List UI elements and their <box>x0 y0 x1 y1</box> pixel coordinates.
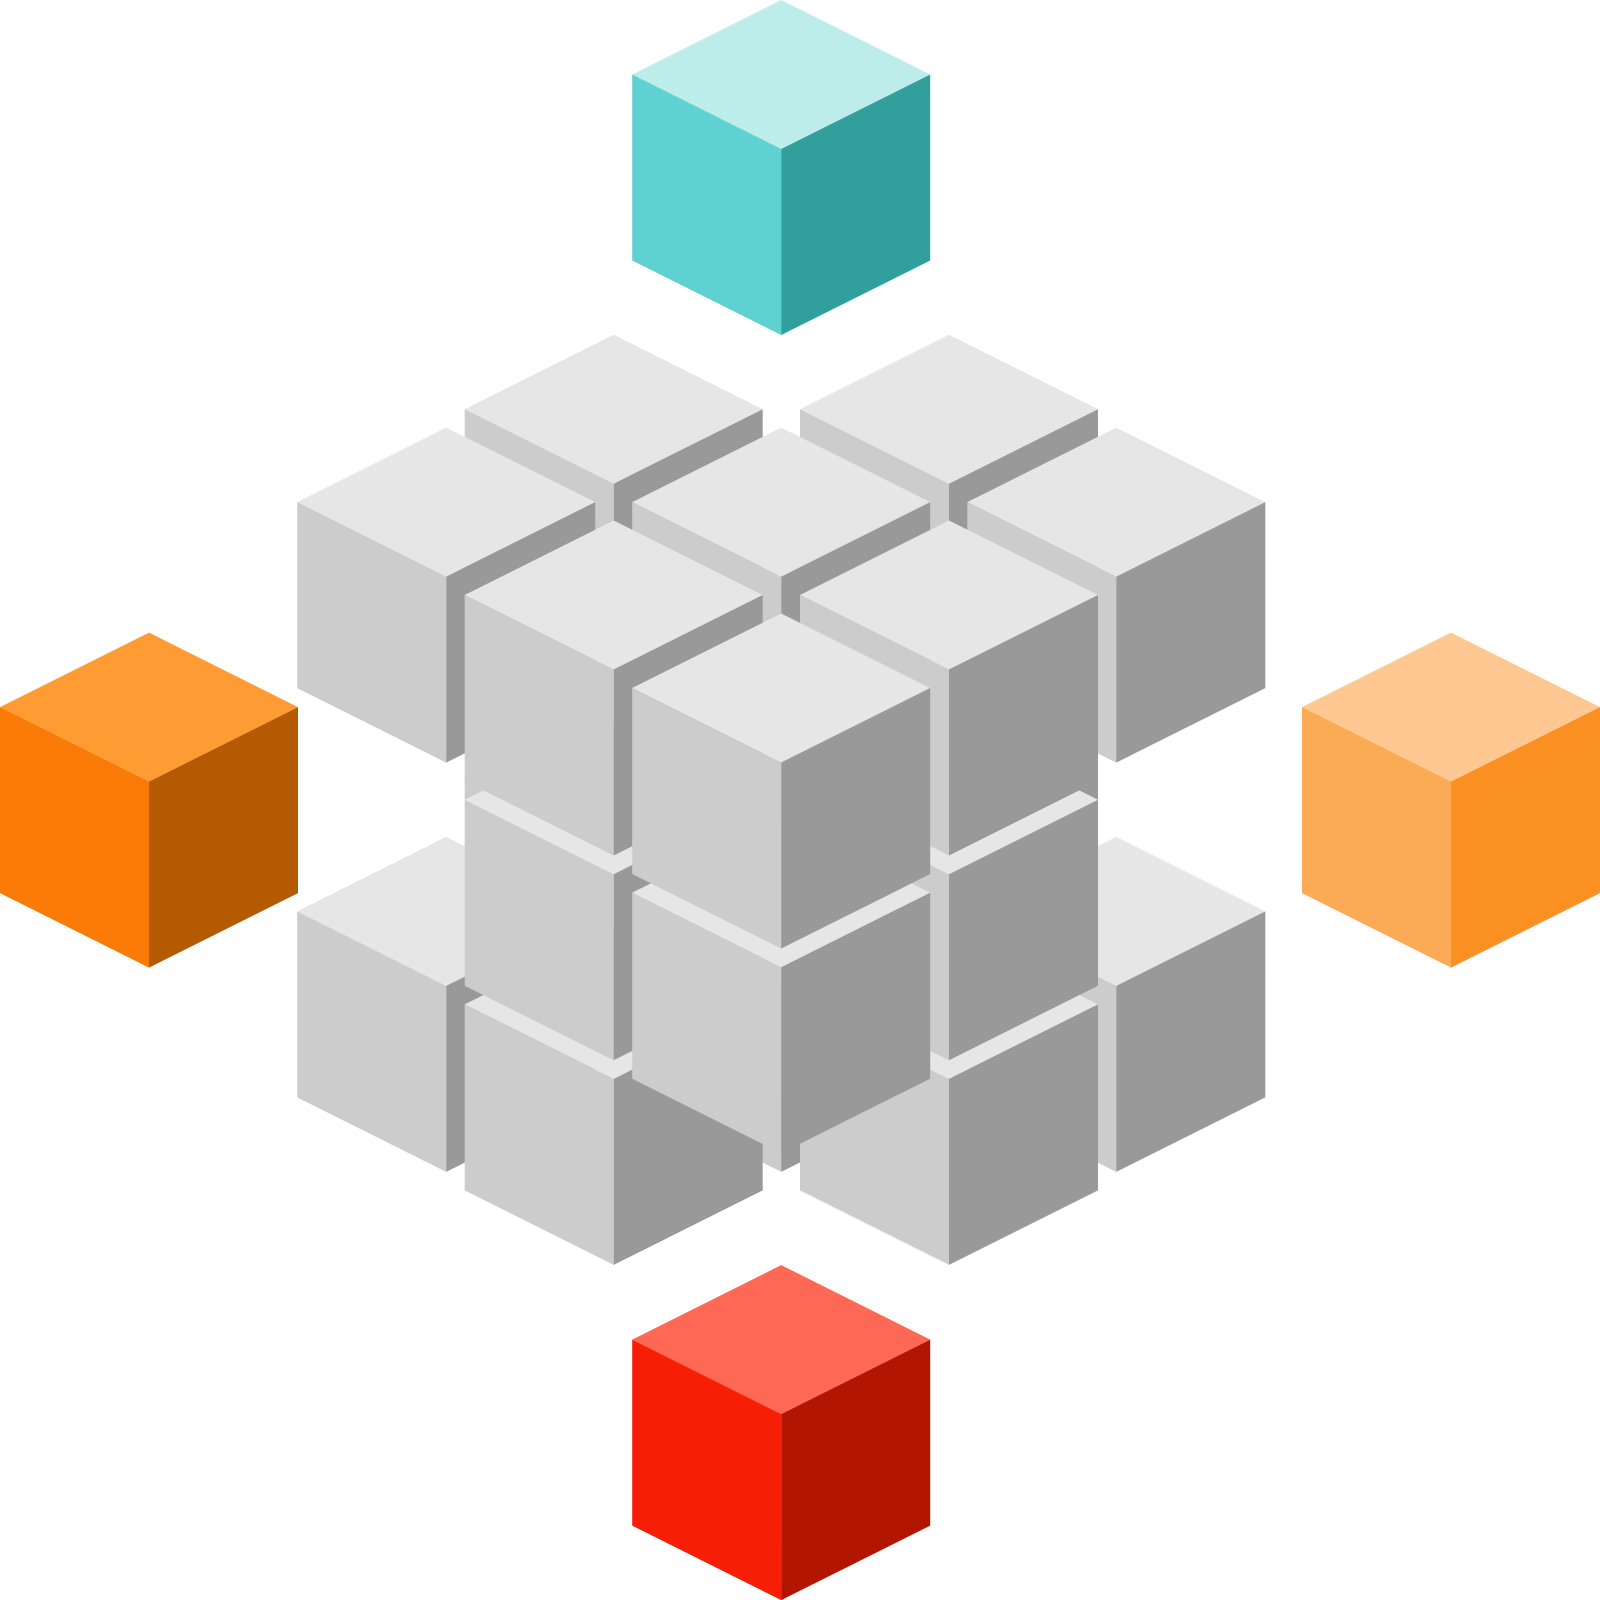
middle layer cube: front <box>632 818 930 1153</box>
hidden cube sliver: left <box>465 775 501 800</box>
bottom layer cube: back left <box>297 837 595 1172</box>
red cube: bottom <box>632 1265 930 1600</box>
top layer cube: back right <box>800 335 1098 670</box>
top layer cube: middle right <box>967 428 1265 763</box>
bottom layer cube: back right <box>967 837 1265 1172</box>
teal cube: top <box>632 0 930 335</box>
grey cube cluster <box>297 335 1265 1265</box>
top layer cube: front left <box>465 520 763 856</box>
bottom layer cube: back centre <box>632 837 930 1172</box>
bottom layer cube: front right <box>800 930 1098 1265</box>
middle layer cube: left <box>465 725 763 1060</box>
light orange cube: right <box>1302 633 1600 968</box>
top layer cube: middle left <box>297 428 595 763</box>
top layer cube: back left <box>465 335 763 670</box>
top layer cube: middle centre <box>632 428 930 763</box>
orange cube: left <box>0 633 298 968</box>
bottom layer cube: front left <box>465 930 763 1265</box>
hidden cube sliver: right <box>1062 775 1098 800</box>
top layer cube: front right <box>800 520 1098 856</box>
middle layer cube: right <box>800 725 1098 1060</box>
top layer cube: front <box>632 614 930 948</box>
